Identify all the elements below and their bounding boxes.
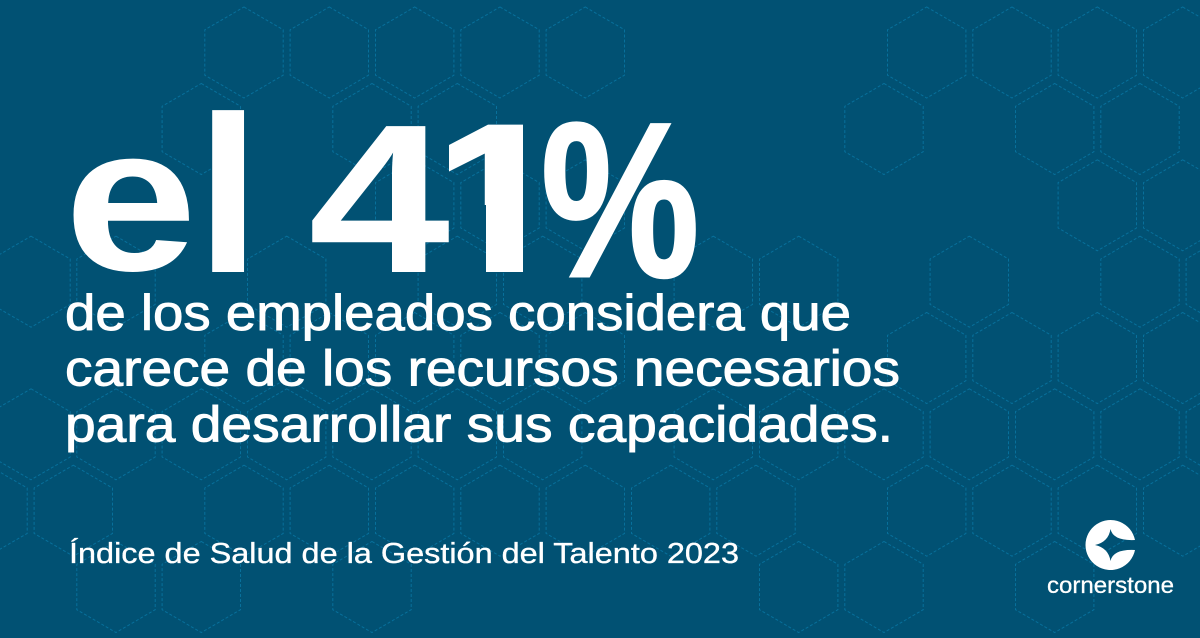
body text bbox=[65, 285, 900, 453]
headline: el 41%: l bbox=[196, 71, 260, 320]
cornerstone logo bbox=[1047, 520, 1174, 598]
body text: para desarrollar sus capacidades. bbox=[65, 397, 893, 453]
headline: el 41%: 1 bbox=[425, 80, 572, 317]
headline: el 41%: % bbox=[541, 78, 699, 323]
headline: el 41%: 4 bbox=[308, 80, 450, 317]
body text: carece de los recursos necesarios bbox=[65, 341, 900, 397]
wordmark: cornerstone bbox=[1047, 572, 1174, 598]
icon: star in circle bbox=[1086, 520, 1135, 570]
body text: de los empleados considera que bbox=[65, 285, 851, 341]
headline: el 41%: e bbox=[64, 84, 197, 314]
source line: Índice de Salud de la Gestión del Talento 2023 bbox=[69, 537, 739, 570]
headline: el 41% bbox=[74, 110, 696, 280]
